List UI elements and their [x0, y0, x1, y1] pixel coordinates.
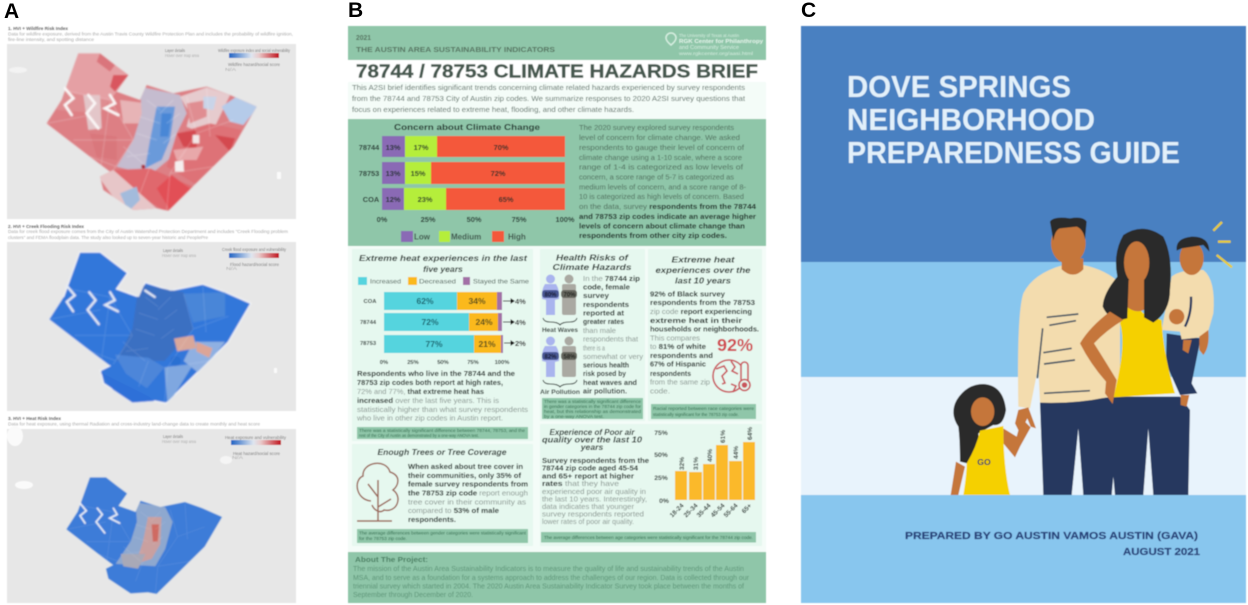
map 2 heading: creek flooding risk index: clusters" and FEMA floodplain data. The study also looked up to seven-year historic and PeoplePre [8, 235, 208, 240]
map 3 heading: heat risk index: Data for heat exposure, using thermal Radiation and cross-industry land-change data to create monthly and heat score [8, 422, 260, 426]
bar chart: poor air quality by age: 40% [707, 449, 714, 462]
stacked bar chart: heat experiences: 0% [380, 360, 388, 366]
section paragraph: climate change using a 1-10 scale, where a score [579, 153, 742, 162]
panel paragraph: respondents [650, 369, 691, 378]
panel paragraph: respondents from the 78753 [650, 298, 755, 307]
bar chart: poor air quality by age: 50% [654, 452, 668, 459]
section paragraph: on the data, survey respondents from the 78744 [579, 202, 757, 211]
main title [348, 60, 766, 82]
chart legend [401, 231, 526, 242]
stacked bar chart: heat experiences: COA [364, 299, 377, 305]
map 2 heading: creek flooding risk index [8, 224, 288, 240]
stacked bar chart [359, 136, 575, 224]
panel paragraph [408, 462, 528, 524]
panel paragraph: code, female [583, 282, 630, 292]
bar chart: poor air quality by age: 61% [720, 430, 727, 443]
legend [358, 277, 529, 286]
bar chart: poor air quality by age: 55-64 [723, 502, 740, 519]
cover title: DOVE SPRINGS [847, 70, 1071, 104]
cover credit [905, 530, 1200, 558]
stacked bar chart: heat experiences: 77% [425, 339, 443, 349]
girl [951, 384, 1031, 495]
map 2: creek flooding risk, blue choropleth [7, 242, 296, 411]
panel paragraph: serious health [583, 360, 629, 370]
stacked bar chart: heat experiences: 62% [416, 296, 434, 306]
bar chart: poor air quality by age: 35-44 [696, 502, 713, 519]
legend: Decreased [419, 278, 456, 286]
map 3: heat risk, blue choropleth with red core: Layer details [163, 434, 184, 439]
panel paragraph: increased over the last five years. This is [357, 396, 499, 405]
stacked bar chart: heat experiences: 4% [515, 318, 526, 327]
cover title: PREPAREDNESS GUIDE [847, 136, 1180, 170]
panel paragraph: statistically higher than what survey respondents [357, 405, 528, 414]
statistical note: The average differences between gender categories were statistically significant [359, 530, 527, 536]
statistical note: for the 78753 zip code. [359, 536, 407, 541]
stacked bar chart: 78753 [359, 169, 379, 178]
icon: female and male figures, heat waves: 80% [544, 292, 557, 298]
intro text [352, 83, 745, 114]
stacked bar chart: 15% [411, 169, 426, 178]
icon: female and male figures, heat waves [542, 274, 579, 334]
stacked bar chart: 75% [512, 215, 527, 224]
chart legend: High [508, 232, 526, 242]
bar chart: poor air quality by age: 18-24 [669, 502, 686, 519]
panel: extreme heat experiences, last five years [352, 249, 533, 441]
map 2: creek flooding risk, blue choropleth: Creek flood exposure and vulnerability [222, 247, 287, 252]
panel paragraph: zip code report experiencing [650, 307, 753, 316]
panel paragraph [542, 456, 649, 526]
icon: female and male figures, air pollution: 82% [544, 354, 557, 360]
cover colour bands [801, 26, 1246, 603]
stacked bar chart: heat experiences: 75% [467, 360, 479, 366]
icon: female and male figures, heat waves: Heat Waves [542, 327, 579, 334]
panel paragraph: risk posed by [583, 369, 627, 378]
bar chart: poor air quality by age: 44% [733, 446, 740, 459]
bar chart: poor air quality by age: 32% [679, 457, 686, 470]
bar chart: poor air quality by age: 64% [747, 427, 754, 440]
panel paragraph: 72% and 77%, that extreme heat has [357, 387, 484, 396]
panel C: preparedness guide cover [801, 26, 1246, 603]
section paragraph: medium levels of concern, and a score range of 8- [579, 182, 747, 192]
panel paragraph: and 65+ report at higher [542, 472, 634, 480]
panel B: climate hazards brief: 78744 / 78753 CLIMATE HAZARDS BRIEF [356, 62, 758, 82]
panel heading: Health Risks of [556, 252, 629, 262]
panel: health risks of climate hazards: Climate Hazards [552, 262, 632, 272]
panel paragraph: data indicates that younger [542, 502, 635, 511]
stacked bar chart: heat experiences: 21% [478, 339, 496, 349]
map 1: wildfire risk, red choropleth: Wildfire hazard/social score [228, 62, 280, 67]
map 3 heading: heat risk index: 3. HVI + Heat Risk Index [8, 416, 61, 422]
stacked bar chart: heat experiences: 34% [468, 296, 486, 306]
panel paragraph [583, 274, 643, 396]
statistical note [542, 398, 643, 419]
chart legend: Medium [451, 232, 481, 242]
map 2 heading: creek flooding risk index: Data for creek flood exposure comes from the City of Austin Watershed Protection Department and includes "Creek Flooding problem [8, 229, 288, 234]
bar chart: poor air quality by age: 31% [693, 457, 700, 470]
panel paragraph: extreme heat in their [650, 316, 742, 325]
panel paragraph: In the 78744 zip [583, 274, 641, 283]
panel paragraph: Respondents who live in the 78744 and the [357, 369, 515, 378]
map 3: heat risk, blue choropleth with red core: Heat exposure and vulnerability [225, 435, 287, 440]
panel paragraph: respondents and [650, 351, 714, 360]
panel: extreme heat experiences, last 10 years: last 10 years [675, 276, 731, 286]
section: about the project: About The Project: [355, 555, 428, 564]
panel paragraph: female survey respondents from [408, 480, 528, 488]
man [1015, 218, 1120, 433]
stacked bar chart: 17% [414, 143, 429, 152]
section: about the project: September through December of 2020. [353, 592, 473, 599]
stacked bar chart: 78744 [359, 143, 380, 152]
map 1 heading: wildfire risk index: 1. HVI + Wildfire Risk Index [8, 26, 68, 32]
chart legend: Low [414, 232, 431, 242]
intro text: This A2SI brief identifies significant trends concerning climate related hazards experienced by survey respondents [352, 83, 745, 92]
stacked bar chart: 65% [499, 195, 514, 204]
panel paragraph: their communities, only 35% of [408, 471, 522, 480]
panel paragraph [650, 290, 759, 396]
panel paragraph: 78744 zip code aged 45-54 [542, 464, 639, 472]
cover title: NEIGHBORHOOD [847, 103, 1095, 137]
stacked bar chart: 23% [418, 195, 433, 204]
map 1: wildfire risk, red choropleth: Wildfire exposure index and social vulnerability [218, 48, 291, 53]
statistical note: Racial reported between race categories were [653, 406, 754, 411]
header bar: www.rgkcenter.org/aasi.html [679, 51, 753, 57]
panel paragraph: households or neighborhoods. [650, 324, 759, 334]
bar chart: poor air quality by age: 75% [654, 430, 668, 437]
statistical note [651, 404, 756, 419]
map 1: wildfire risk, red choropleth: Hover over map area [165, 53, 199, 58]
panel heading: Extreme heat [672, 254, 736, 264]
panel: experience of poor air quality [540, 424, 762, 546]
map 1: wildfire risk, red choropleth: Layer details [165, 48, 186, 53]
section paragraph: respondents from other city zip codes. [579, 231, 727, 240]
icon: female and male figures, air pollution: 58% [563, 354, 576, 360]
panel: extreme heat experiences, last 10 years [648, 249, 762, 421]
statistical note: by a one-way ANOVA test. [544, 414, 604, 419]
statistical note: The average differences between age categories were statistically significant for the 78744 zip code. [544, 535, 753, 540]
section paragraph: respondents to gauge their level of concern of [579, 143, 745, 152]
section paragraph: levels of concern about climate change than [579, 222, 746, 230]
stacked bar chart: heat experiences: 24% [475, 317, 493, 327]
cover title [847, 70, 1180, 170]
map 1 heading: wildfire risk index: fire-line intensity, and spotting distance [8, 37, 94, 42]
panel paragraph: code. [650, 386, 670, 396]
section: about the project [348, 552, 766, 603]
panel A: hazard risk maps [7, 26, 296, 603]
intro text: focus on experiences related to extreme heat, flooding, and other climate hazards. [352, 105, 634, 114]
panel paragraph: lower rates of poor air quality. [542, 517, 634, 526]
panel paragraph: When asked about tree cover in [408, 462, 523, 471]
panel paragraph [356, 369, 528, 422]
stacked bar chart: 12% [386, 195, 401, 204]
panel paragraph: compared to 53% of male [408, 506, 499, 515]
big statistic: 92%: 92% [717, 335, 753, 355]
map 3: heat risk, blue choropleth with red core: Heat hazard/social score [233, 451, 280, 456]
panel: experience of poor air quality: years [580, 442, 603, 452]
statistical note [357, 427, 528, 439]
section paragraph: and 78753 zip codes indicate an average higher [579, 212, 756, 221]
map 2: creek flooding risk, blue choropleth: N/A [226, 266, 238, 271]
section: about the project: The mission of the Austin Area Sustainability Indicators is to measure the quality of life and sustainability trends of the Austin [353, 566, 744, 573]
map 2 heading: creek flooding risk index: 2. HVI + Creek Flooding Risk Index [8, 224, 84, 230]
stacked bar chart: 13% [386, 169, 401, 178]
statistical note: in gender categories in the 78744 zip code for [544, 404, 641, 409]
stacked bar chart: heat experiences: 100% [495, 360, 509, 366]
panel paragraph: the last 10 years. Interestingly, [542, 494, 647, 504]
panel paragraph: who live in other zip codes in Austin report. [356, 414, 503, 422]
header bar: RGK Center for Philanthropy [679, 39, 763, 45]
map 1: wildfire risk, red choropleth [7, 44, 296, 219]
panel paragraph: rates that they have [542, 479, 619, 488]
stacked bar chart: heat experiences: 4% [515, 297, 526, 306]
panel paragraph: air pollution. [583, 386, 627, 396]
man and woman trousers [1040, 397, 1190, 495]
panel paragraph: experienced poor air quality in [542, 487, 646, 496]
header bar [348, 26, 766, 60]
stacked bar chart: 13% [386, 143, 401, 152]
panel paragraph: heat waves and [583, 378, 637, 387]
legend: Increased [370, 278, 401, 286]
panel paragraph: tree cover in their community as [408, 498, 526, 506]
map 3 heading: heat risk index [8, 416, 260, 426]
panel paragraph: to 81% of white [650, 342, 706, 351]
panel paragraph: respondents. [408, 515, 456, 524]
illustration: family [951, 218, 1232, 495]
stacked bar chart: heat experiences: 78744 [360, 320, 377, 326]
woman [1080, 229, 1175, 404]
map 1: wildfire risk, red choropleth: N/A [225, 67, 237, 72]
panel heading: Enough Trees or Tree Coverage [378, 447, 507, 457]
panel: health risks of climate hazards [540, 249, 645, 421]
stacked bar chart: 50% [467, 215, 482, 224]
bar chart: poor air quality by age: 0% [659, 498, 669, 505]
section paragraph: concern, a score range of 5-7 is categorized as [579, 172, 734, 182]
cover credit: PREPARED BY GO AUSTIN VAMOS AUSTIN (GAVA) [905, 530, 1198, 542]
intro text: from the 78744 and 78753 City of Austin zip codes. We summarize responses to 2020 A2SI survey questions that [352, 94, 745, 103]
statistical note [357, 529, 528, 543]
panel paragraph: survey [583, 291, 610, 300]
statistical note: statistically significant for the 78753 zip code. [653, 412, 739, 417]
header bar: 2021 [356, 35, 371, 42]
map 3: heat risk, blue choropleth with red core: N/A [232, 455, 244, 460]
map 3: heat risk, blue choropleth with red core: Hover over map area [162, 439, 196, 444]
stacked bar chart: heat experiences: 78753 [360, 341, 377, 347]
panel paragraph: there is a [583, 344, 606, 352]
panel: extreme heat experiences, last five years: five years [423, 264, 463, 274]
panel paragraph: 67% of Hispanic [650, 360, 706, 368]
stacked bar chart: 100% [556, 215, 575, 224]
panel B: climate hazards brief [348, 26, 766, 603]
panel paragraph: survey respondents reported [542, 510, 644, 518]
icon: female and male figures, air pollution: Air Pollution [540, 389, 580, 396]
cover credit: AUGUST 2021 [1123, 546, 1200, 558]
header bar: THE AUSTIN AREA SUSTAINABILITY INDICATORS [356, 47, 555, 54]
bar chart: poor air quality by age [654, 427, 755, 519]
bar chart: poor air quality by age: 25-34 [683, 502, 700, 519]
statistical note: There was a statistically significant difference [544, 399, 641, 404]
map 2: creek flooding risk, blue choropleth: Layer details [163, 248, 184, 253]
sparkle lines [1213, 222, 1232, 267]
stacked bar chart: 25% [421, 215, 436, 224]
page background [348, 26, 766, 603]
icon: tree [357, 463, 398, 521]
stacked bar chart: 70% [494, 143, 509, 152]
statistical note: There was a statistically significant difference between 78744, 78753, and the [359, 428, 525, 433]
statistical note: heat, but this relationship as demonstrated [544, 409, 641, 414]
bar chart: poor air quality by age: 25% [654, 475, 668, 482]
section: about the project: MSA, and to serve as a foundation for a systems approach to address the challenges of our region. Data is collected through our [353, 575, 750, 582]
panel paragraph: respondents that [583, 334, 638, 344]
panel: extreme heat experiences, last 10 years: experiences over the [656, 265, 751, 275]
icon: female and male figures, heat waves: 70% [563, 292, 576, 298]
panel letter A: A [4, 0, 19, 23]
map 2: creek flooding risk, blue choropleth: Flood hazard/social score [230, 262, 279, 267]
stacked bar chart: COA [363, 195, 380, 204]
panel: experience of poor air quality: quality over the last 10 [542, 434, 642, 444]
legend: Stayed the Same [473, 278, 529, 286]
map 2: creek flooding risk, blue choropleth: Hover over map area [162, 253, 196, 258]
icon: globe with thermometer [713, 360, 750, 392]
panel paragraph: This compares [650, 334, 700, 342]
panel heading: Extreme heat experiences in the last [359, 253, 528, 263]
panel paragraph: Survey respondents from the [542, 456, 649, 465]
statistical note [541, 532, 756, 542]
panel heading: Experience of Poor air [550, 427, 635, 437]
header bar: and Community Service [679, 45, 739, 51]
stacked bar chart: heat experiences [360, 292, 526, 366]
panel paragraph: greater rates [583, 317, 624, 326]
stacked bar chart: heat experiences: 50% [437, 360, 449, 366]
panel: enough trees or tree coverage [352, 444, 533, 546]
section: about the project: triennial survey which started in 2004. The 2020 Austin Area Sustainability Indicator Survey took place between the months of [353, 584, 744, 590]
stacked bar chart: 0% [377, 215, 388, 224]
panel paragraph: 92% of Black survey [650, 290, 726, 298]
map 3: heat risk, blue choropleth with red core [7, 426, 296, 603]
panel paragraph: 78753 zip codes both report at high rates, [357, 378, 503, 387]
section paragraph: 10 is categorized as high levels of concern. Based [579, 192, 744, 201]
bar chart: poor air quality by age: 45-54 [710, 502, 727, 519]
panel paragraph: reported at [583, 308, 625, 318]
section paragraph: level of concern for climate change. We asked [579, 133, 740, 142]
panel paragraph: than male [583, 326, 616, 335]
stacked bar chart: heat experiences: 25% [407, 360, 419, 366]
panel paragraph: respondents [583, 300, 629, 309]
stacked bar chart: heat experiences: 2% [515, 339, 526, 348]
map 1 heading: wildfire risk index [8, 26, 293, 42]
toddler [1162, 237, 1214, 407]
panel paragraph: from the same zip [650, 378, 710, 386]
section paragraph: The 2020 survey explored survey respondents [579, 123, 734, 132]
section: concern about climate change [348, 119, 766, 246]
panel paragraph: the 78753 zip code report enough [408, 488, 528, 498]
bar chart: poor air quality by age: 65+ [741, 502, 754, 515]
stacked bar chart: 72% [491, 169, 506, 178]
girl: GO [977, 457, 991, 467]
section paragraph [579, 123, 757, 240]
chart heading: Concern about Climate Change [394, 123, 541, 132]
panel paragraph: somewhat or very [583, 352, 643, 361]
header bar: The University of Texas at Austin [679, 33, 739, 39]
icon: female and male figures, air pollution [540, 336, 580, 396]
section paragraph: range of 1-4 is categorized as low levels of [579, 162, 744, 172]
map 1 heading: wildfire risk index: Data for wildfire exposure, derived from the Austin Travis County Wildfire Protection Plan and includes the probability of wildfire ignition, [8, 32, 293, 36]
stacked bar chart: heat experiences: 72% [421, 317, 439, 327]
statistical note: rest of the City of Austin as demonstrated by a one-way ANOVA test. [359, 433, 479, 438]
